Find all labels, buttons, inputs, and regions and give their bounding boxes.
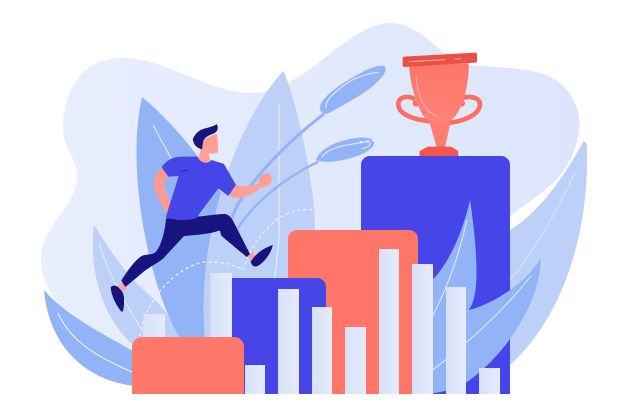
skin: feet — [118, 251, 256, 292]
trophy — [398, 53, 480, 156]
front arm and fist — [229, 173, 272, 198]
block: coral tall — [288, 230, 418, 394]
block: blue short — [232, 278, 326, 394]
trophy base — [420, 147, 458, 156]
background blob — [41, 23, 580, 348]
back shoe — [111, 286, 124, 312]
leaf: large left — [136, 97, 240, 340]
white bars — [143, 249, 500, 394]
trousers — [121, 214, 250, 287]
trophy cup — [409, 63, 469, 124]
leaf: large right — [510, 142, 587, 365]
block: coral short — [132, 337, 244, 394]
block: blue tall podium — [361, 156, 510, 394]
leaf: bottom left — [44, 290, 135, 386]
leaf: small left — [93, 225, 182, 345]
trophy lid — [403, 53, 477, 67]
leaf: on podium — [420, 200, 541, 394]
trophy stem — [429, 122, 451, 147]
front shoe — [251, 245, 273, 266]
t-shirt — [162, 157, 236, 220]
trophy handles — [398, 97, 480, 123]
runner — [111, 124, 273, 312]
back arm — [154, 167, 175, 215]
plant stems with oval seed heads — [232, 66, 386, 230]
dashed jump arcs — [140, 139, 384, 336]
leaf: tall centre — [203, 71, 315, 340]
neck and head — [197, 134, 218, 164]
hair — [193, 124, 218, 149]
